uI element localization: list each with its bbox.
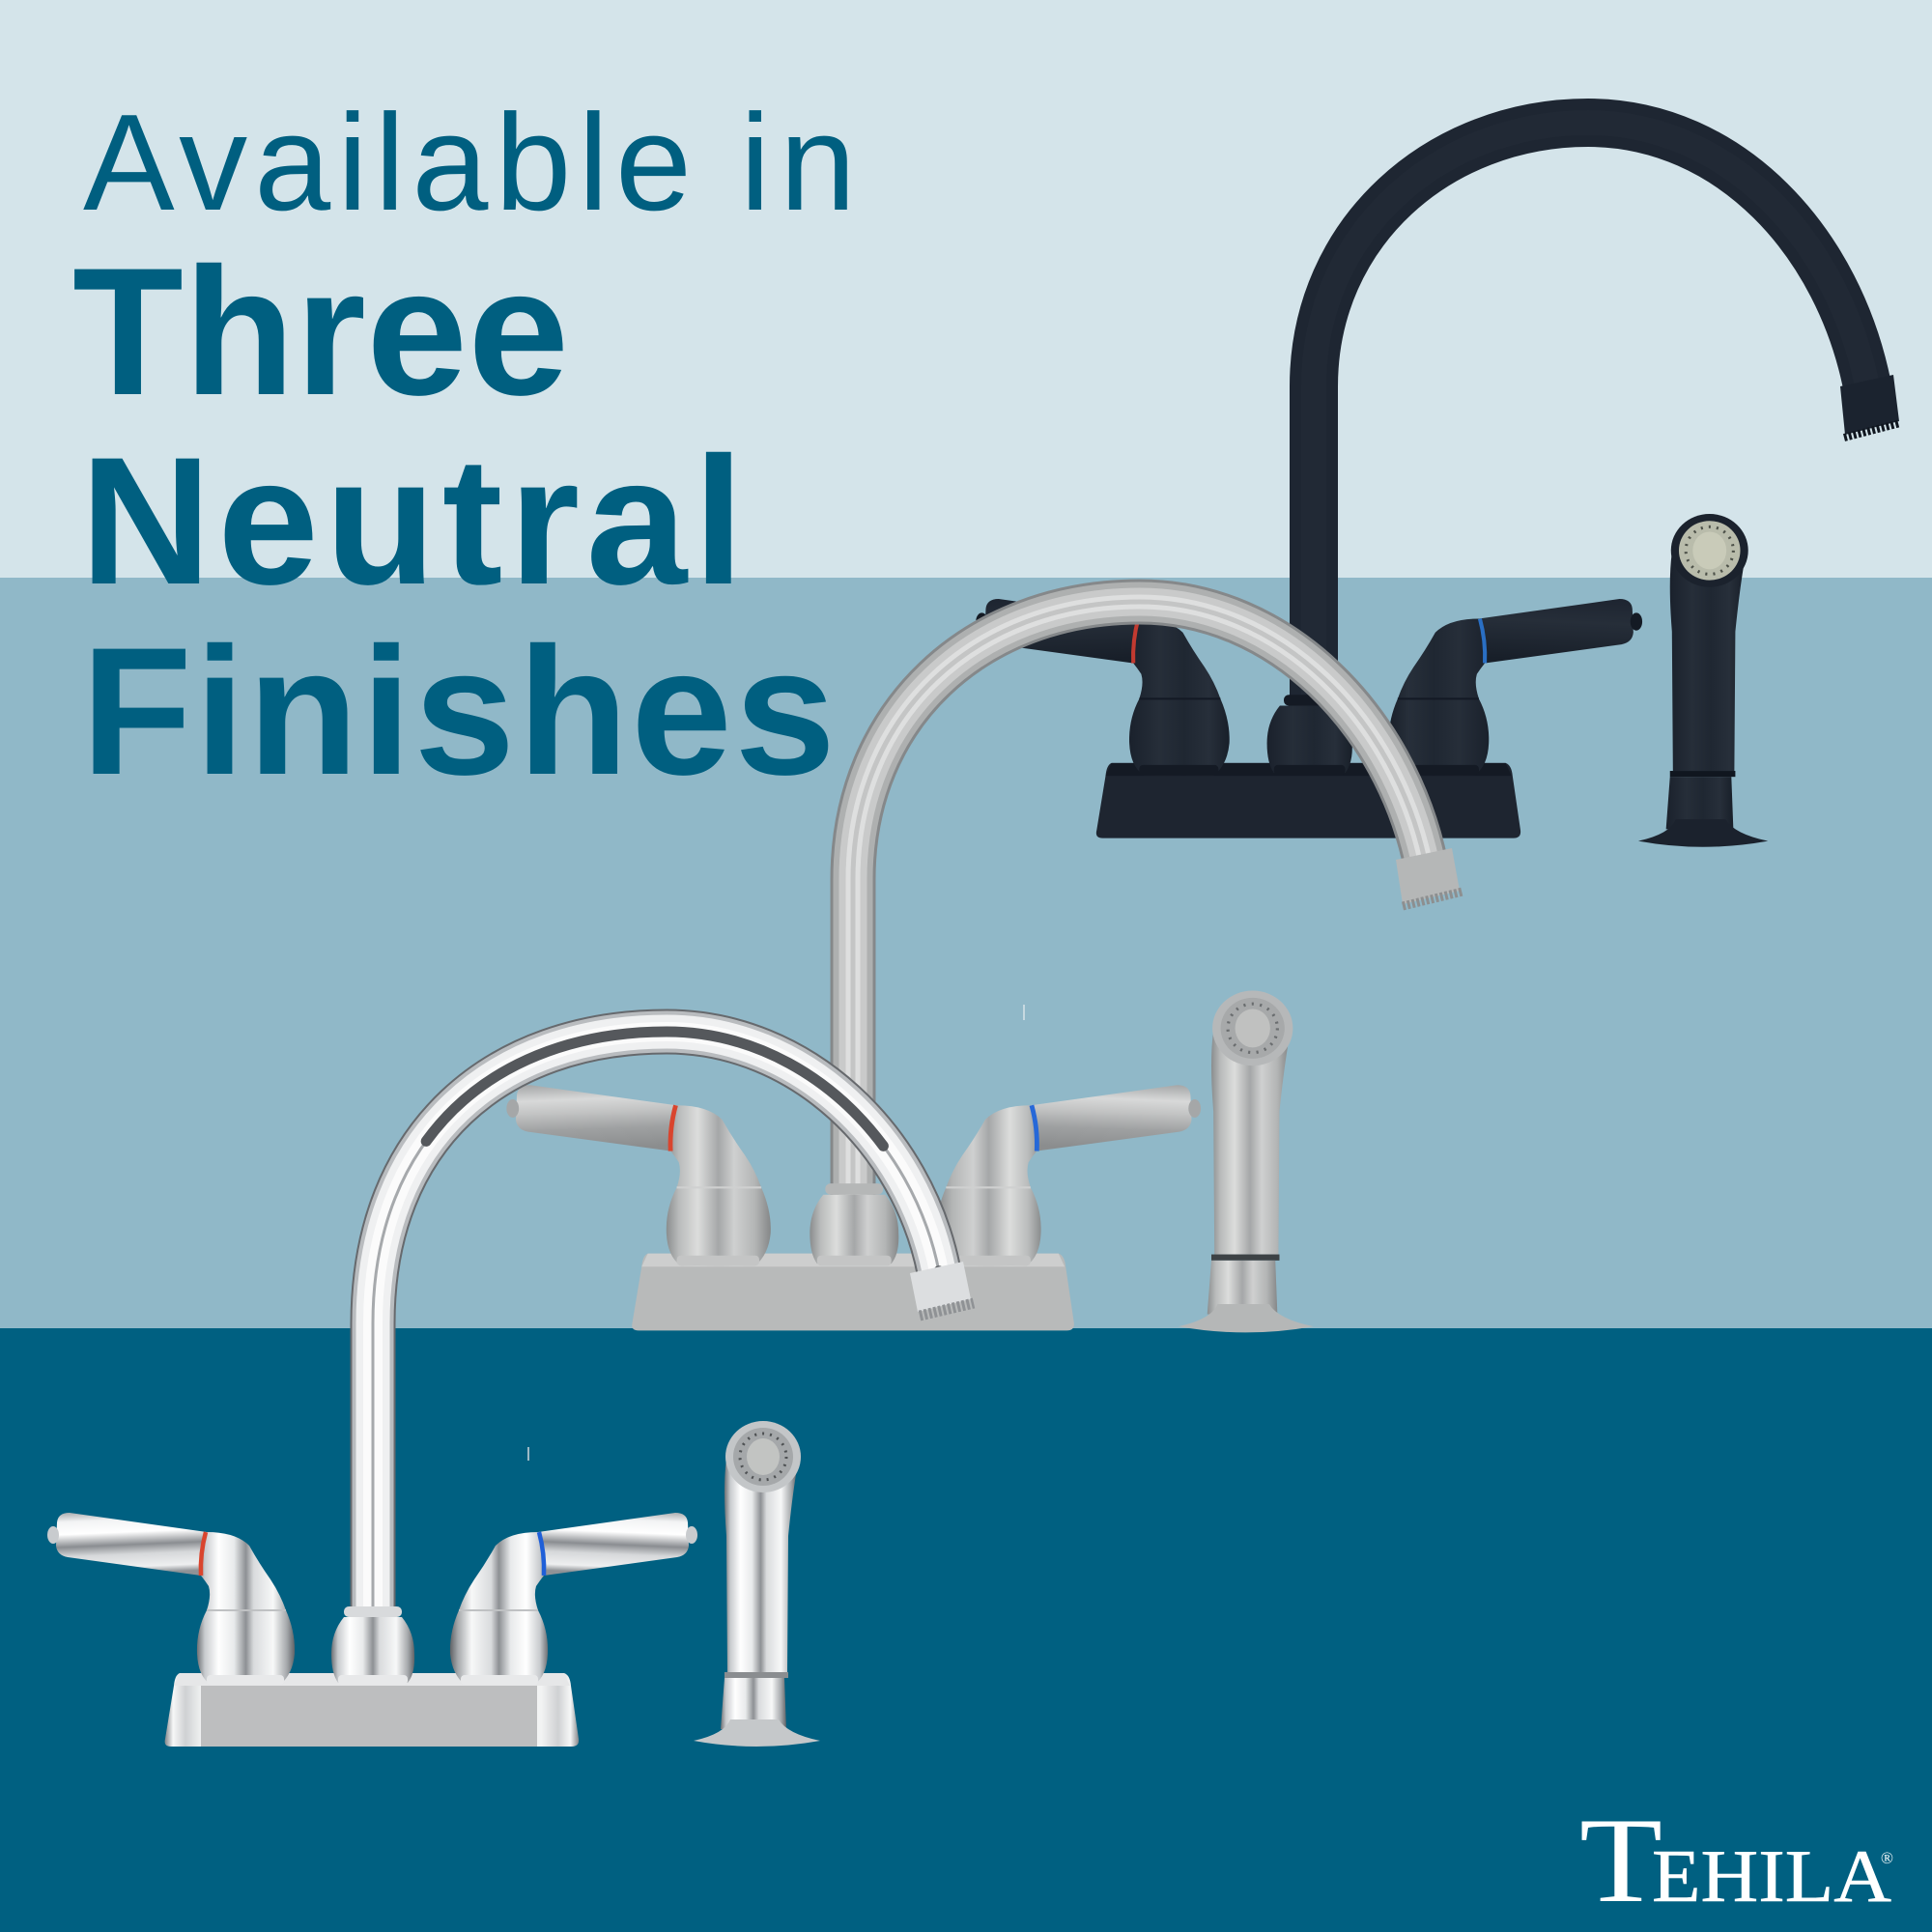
chrome deck plate <box>165 1673 579 1747</box>
nickel deck and handles <box>506 1085 1201 1330</box>
nickel centre collar <box>810 1183 898 1265</box>
faucet: matte black <box>976 123 1900 847</box>
black side sprayer <box>1638 514 1768 847</box>
background band: dark <box>0 1328 1932 1932</box>
heading line: Finishes: Finishes <box>81 610 836 812</box>
logo: Tehila <box>1579 1794 1893 1928</box>
black deck and handles <box>976 514 1768 847</box>
faucet: brushed nickel <box>506 602 1463 1332</box>
chrome right handle <box>450 1513 697 1685</box>
heading line: Available in: Available <box>83 86 692 240</box>
stray retouching mark <box>1023 1005 1025 1020</box>
chrome centre collar <box>331 1606 414 1685</box>
nickel deck plate <box>632 1254 1074 1330</box>
background band: medium <box>0 578 1932 1328</box>
faucet: polished chrome <box>47 1032 974 1747</box>
black deck plate <box>1096 763 1520 838</box>
nickel left handle <box>506 1085 771 1265</box>
heading line: Available in: in <box>740 86 856 240</box>
nickel right handle <box>937 1085 1201 1265</box>
nickel side sprayer <box>1179 991 1314 1332</box>
logo initial: T <box>1579 1794 1662 1928</box>
heading line: Three: Three <box>72 230 569 433</box>
stray retouching mark <box>527 1447 529 1461</box>
registered mark: ® <box>1881 1849 1893 1867</box>
black centre collar <box>1267 695 1352 775</box>
logo letters: EHILA <box>1652 1834 1891 1918</box>
heading line: Neutral: Neutral <box>80 419 744 622</box>
chrome spout <box>373 1032 974 1613</box>
chrome side sprayer <box>694 1421 820 1747</box>
black spout <box>1314 123 1900 773</box>
black left handle <box>976 599 1230 775</box>
chrome left handle <box>47 1513 295 1685</box>
black right handle <box>1389 599 1642 775</box>
nickel spout <box>853 602 1463 1198</box>
heading <box>72 86 856 812</box>
background band: light <box>0 0 1932 578</box>
